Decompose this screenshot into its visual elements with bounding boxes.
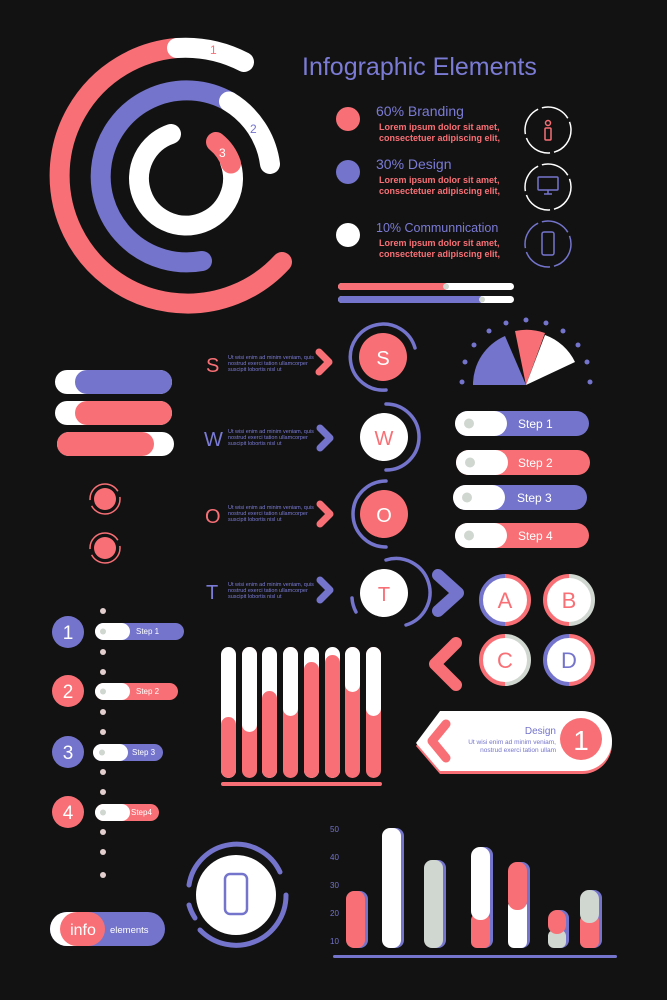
big chevrons (435, 575, 458, 685)
bottom bar chart (330, 825, 617, 958)
radial ring chart: 2 (250, 122, 257, 136)
SWOT: W (204, 429, 223, 451)
bottom bar chart: 20 (330, 909, 339, 918)
title: Infographic Elements (302, 53, 537, 81)
SWOT: Ut wisi enim ad minim veniam, quis (228, 355, 314, 361)
SWOT: S (206, 355, 219, 377)
design callout: nostrud exerci tation ullam (480, 747, 556, 754)
SWOT: S (376, 348, 390, 370)
legend: communication (336, 221, 500, 259)
left numbered steps: Step 2 (136, 687, 160, 696)
legend: communication: consectetuer adipiscing elit, (379, 249, 500, 259)
legend: branding: 60% Branding (376, 103, 464, 119)
legend: branding: consectetuer adipiscing elit, (379, 133, 500, 143)
left numbered steps: Step4 (131, 808, 152, 817)
icon: person (525, 107, 571, 153)
design callout: Ut wisi enim ad minim veniam, (468, 739, 556, 746)
SWOT: T (206, 582, 218, 604)
SWOT: nostrud exerci tation ullamcorper (228, 435, 308, 441)
vertical bar chart (221, 647, 382, 786)
SWOT: nostrud exerci tation ullamcorper (228, 511, 308, 517)
ABCD circles: A (498, 588, 513, 613)
step toggles right (453, 411, 590, 548)
ABCD circles: B (562, 588, 576, 613)
left numbered steps: 4 (63, 803, 74, 824)
step toggles right: Step 3 (517, 491, 552, 505)
legend: design (336, 156, 500, 196)
bottom bar chart: 50 (330, 825, 339, 834)
ABCD circles (481, 576, 593, 684)
left numbered steps: 2 (63, 682, 73, 703)
progress bars (338, 283, 514, 303)
legend: branding: Lorem ipsum dolor sit amet, (379, 122, 500, 132)
design callout: 1 (573, 725, 589, 756)
pie gauge (460, 318, 592, 385)
legend: design: 30% Design (376, 156, 452, 172)
legend: communication: Lorem ipsum dolor sit amet, (379, 238, 500, 248)
SWOT: W (375, 428, 394, 450)
small ring icons (90, 484, 120, 563)
SWOT: T (378, 584, 390, 606)
icon: monitor (525, 164, 571, 210)
bottom bar chart: 40 (330, 853, 339, 862)
legend: branding (336, 103, 500, 143)
step toggles right: Step 1 (518, 417, 553, 431)
bottom bar chart: 10 (330, 937, 339, 946)
legend: design: Lorem ipsum dolor sit amet, (379, 175, 500, 185)
SWOT: O (205, 506, 221, 528)
phone circle (189, 844, 286, 945)
design callout (416, 711, 612, 774)
left numbered steps (52, 608, 184, 878)
step toggles right: Step 4 (518, 529, 553, 543)
ABCD circles: C (497, 648, 513, 673)
SWOT: Ut wisi enim ad minim veniam, quis (228, 582, 314, 588)
info elements pill: info (70, 922, 96, 939)
SWOT: nostrud exerci tation ullamcorper (228, 588, 308, 594)
legend: design: consectetuer adipiscing elit, (379, 186, 500, 196)
left numbered steps: Step 3 (132, 748, 156, 757)
SWOT (204, 324, 430, 625)
left numbered steps: 1 (63, 623, 73, 644)
radial ring chart: 1 (210, 43, 217, 57)
SWOT: Ut wisi enim ad minim veniam, quis (228, 505, 314, 511)
SWOT: O (376, 505, 392, 527)
radial ring chart: 3 (219, 146, 226, 160)
SWOT: suscipit lobortis nisl ut (228, 594, 282, 600)
info elements pill: elements (110, 925, 149, 936)
left numbered steps: Step 1 (136, 627, 160, 636)
left numbered steps: 3 (63, 743, 73, 764)
SWOT: Ut wisi enim ad minim veniam, quis (228, 429, 314, 435)
SWOT: nostrud exerci tation ullamcorper (228, 361, 308, 367)
info elements pill (50, 912, 165, 946)
SWOT: suscipit lobortis nisl ut (228, 441, 282, 447)
radial ring chart (60, 43, 282, 304)
bottom bar chart: 30 (330, 881, 339, 890)
stacked pills (55, 370, 174, 456)
SWOT: suscipit lobortis nisl ut (228, 367, 282, 373)
icon: phone (525, 221, 571, 267)
ABCD circles: D (561, 648, 577, 673)
design callout: Design (525, 726, 556, 737)
SWOT: suscipit lobortis nisl ut (228, 517, 282, 523)
step toggles right: Step 2 (518, 456, 553, 470)
legend: communication: 10% Communnication (376, 221, 498, 235)
